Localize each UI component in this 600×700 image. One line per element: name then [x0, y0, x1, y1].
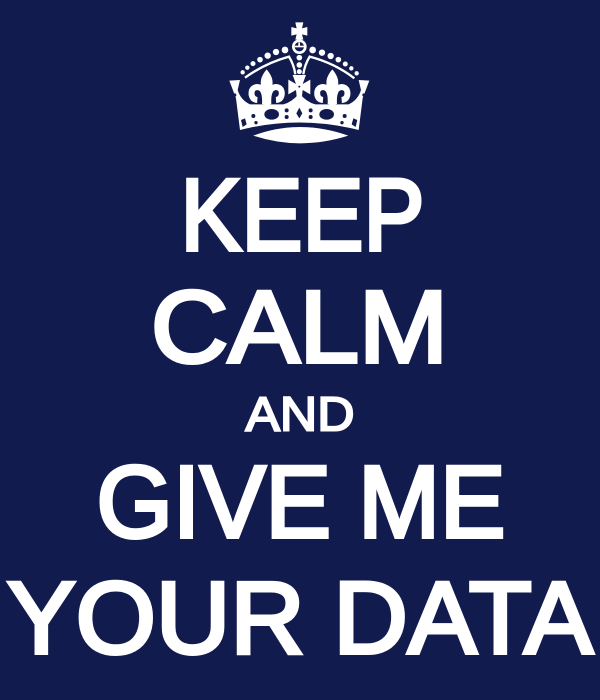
crown cross and orb — [291, 22, 307, 54]
heading: CALM: CALM — [151, 270, 448, 384]
crown base — [253, 127, 348, 143]
crown jewel cutouts — [233, 86, 366, 127]
heading: KEEP: KEEP — [180, 158, 424, 272]
icon: royal crown — [229, 22, 369, 143]
heading: YOUR DATA: YOUR DATA — [7, 561, 593, 675]
heading: GIVE ME: GIVE ME — [96, 445, 506, 559]
heading: AND: AND — [246, 388, 354, 442]
crown pearls and arches — [240, 47, 359, 78]
crown band with fleurs — [229, 69, 369, 130]
